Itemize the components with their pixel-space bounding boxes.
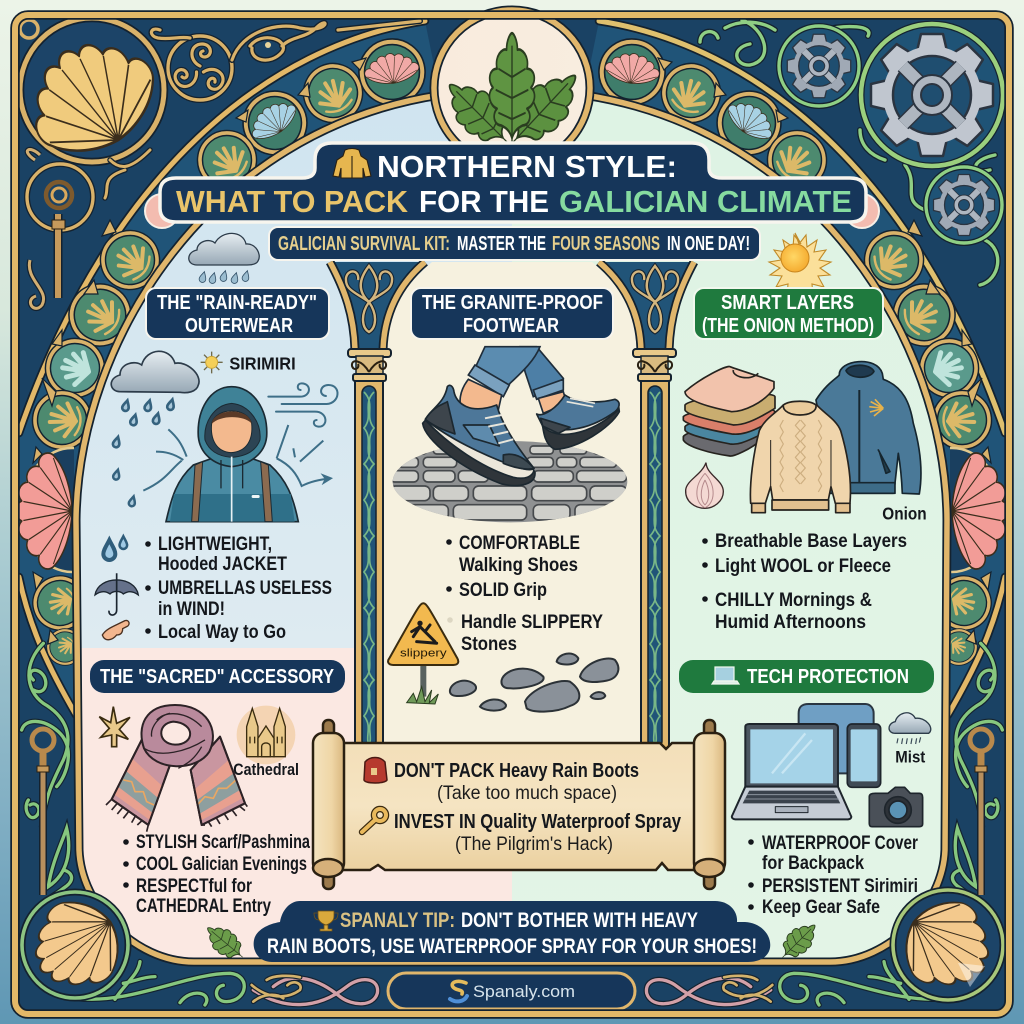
rear walking shoe: [537, 395, 619, 449]
tip banner: [254, 901, 770, 962]
footer pill: Spanaly.com: [473, 982, 575, 1001]
heading: rain-ready outerwear: [146, 288, 329, 339]
cream cable sweater: [750, 401, 850, 513]
left lower vines and staff: [22, 643, 244, 1005]
trouser legs: [460, 347, 567, 413]
icon: laptop: [712, 667, 739, 684]
bottom knotwork right: [646, 976, 772, 1005]
icon: cathedral: [237, 706, 295, 764]
icon: small upper gear: [779, 26, 859, 106]
left scroll roller: [313, 720, 344, 889]
label: cathedral: Cathedral: [233, 760, 299, 779]
icon: smartphone: [847, 724, 881, 787]
text block: outerwear bullets: Hooded JACKET: [158, 554, 287, 575]
arch bands: [19, 21, 1005, 715]
top medallion with oak leaves: [434, 10, 591, 166]
parchment scroll callout: [313, 720, 725, 889]
icon: red bag: [364, 758, 387, 783]
callout line one: DON'T PACK Heavy Rain Boots: [394, 760, 639, 782]
panel: sacred accessory illustration: [99, 705, 299, 832]
text block: tech bullets: for Backpack: [762, 853, 864, 874]
text block: tech bullets: Keep Gear Safe: [762, 897, 880, 918]
icon: bottom right shell medallion: [888, 885, 1008, 1006]
text block: footwear bullets: Handle SLIPPERY: [461, 612, 603, 633]
text block: tech bullets: WATERPROOF Cover: [762, 833, 918, 854]
icon: yellow jacket: [333, 148, 371, 178]
panel: central gothic column: [330, 262, 694, 750]
heading: rain-ready outerwear: THE "RAIN-READY": [157, 292, 317, 314]
tip banner: DON'T BOTHER WITH HEAVY: [461, 909, 698, 932]
tip banner: RAIN BOOTS, USE WATERPROOF SPRAY FOR YOUR SHOES!: [267, 935, 757, 958]
wind arrows: [143, 425, 331, 491]
icon: water drops: [103, 536, 127, 560]
icon: hand: [102, 620, 129, 640]
gold triskelion scrollwork: [105, 21, 420, 198]
title line one: NORTHERN STYLE:: [377, 149, 677, 184]
icon: laptop: [732, 724, 851, 819]
text block: accessory bullets: [123, 832, 310, 917]
text block: smart layers bullets: [702, 531, 907, 633]
text block: smart layers bullets: Humid Afternoons: [715, 612, 866, 633]
label: mist: Mist: [895, 748, 926, 767]
text block: footwear bullets: COMFORTABLE: [459, 533, 580, 554]
pilgrim staff top left: [27, 150, 93, 308]
text block: outerwear bullets: Local Way to Go: [158, 622, 286, 643]
text block: smart layers bullets: Light WOOL or Fleece: [715, 556, 891, 577]
text block: outerwear bullets: in WIND!: [158, 599, 225, 620]
icon: onion: [686, 463, 723, 508]
callout note two: (The Pilgrim's Hack): [455, 834, 613, 855]
icon: bottom left shell medallion: [16, 885, 136, 1006]
heading: granite-proof footwear: [411, 288, 613, 339]
footer pill: [388, 973, 635, 1009]
heading: granite-proof footwear: FOOTWEAR: [463, 315, 559, 337]
icon: storm cloud: [111, 351, 199, 393]
panel: tech protection illustration: [732, 704, 931, 827]
icon: large golden scallop shell in corner medallion: [9, 18, 173, 174]
heading: rain-ready outerwear: OUTERWEAR: [185, 315, 293, 337]
sign label: slippery: [400, 648, 447, 660]
text block: footwear bullets: Stones: [461, 634, 517, 655]
figure in hooded jacket: [166, 387, 298, 522]
left spandrel ornament: [330, 262, 425, 350]
bottom knotwork left: [252, 976, 378, 1005]
icon: waterproof tablet sleeve: [799, 704, 874, 773]
text block: tech bullets: [748, 833, 918, 918]
heading: smart layers: [694, 288, 883, 339]
text block: accessory bullets: STYLISH Scarf/Pashmina: [136, 832, 310, 853]
icon: mist cloud: [889, 713, 931, 744]
callout line two: INVEST IN Quality Waterproof Spray: [394, 811, 682, 833]
icon: camera: [869, 787, 923, 827]
raindrops: [112, 399, 175, 507]
panel: arched background: [60, 80, 962, 970]
text block: outerwear bullets: LIGHTWEIGHT,: [158, 534, 272, 555]
title banner: [160, 143, 866, 222]
icon: umbrella: [95, 573, 138, 615]
right lower vines and staff: [780, 643, 1002, 1005]
wind lines: [268, 383, 338, 427]
heading: smart layers: SMART LAYERS: [721, 292, 854, 314]
icon: trophy: [314, 911, 338, 931]
heading: granite-proof footwear: THE GRANITE-PROOF: [422, 292, 603, 314]
text block: smart layers bullets: Breathable Base Layers: [715, 531, 907, 552]
subtitle banner: [269, 227, 760, 260]
icon: slippery warning sign: [388, 603, 458, 704]
subtitle banner: FOUR SEASONS: [552, 233, 660, 255]
tip banner: SPANALY TIP:: [340, 909, 455, 932]
right scroll roller: [694, 720, 725, 889]
text block: outerwear bullets: [145, 534, 332, 643]
icon: small sun: [201, 352, 223, 373]
panel: rain-ready outerwear illustration: [95, 351, 338, 640]
left medallion chain of shells: [16, 38, 426, 670]
subtitle banner: MASTER THE: [457, 233, 546, 255]
navy jacket: [816, 362, 921, 494]
label: onion: Onion: [882, 503, 927, 523]
panel: smart layers illustration: [683, 362, 927, 523]
subtitle banner: IN ONE DAY!: [667, 233, 750, 255]
front walking shoe: [423, 385, 535, 486]
heading: sacred accessory: THE "SACRED" ACCESSORY: [100, 666, 335, 688]
corner ring: [20, 20, 38, 38]
cobblestone ground: [390, 441, 627, 522]
icon: spanaly logo: [450, 981, 467, 1001]
stack of folded shirts: [683, 367, 775, 456]
text block: footwear bullets: Walking Shoes: [459, 555, 578, 576]
icon: oak leaf left: [200, 919, 250, 966]
right spandrel ornament: [599, 262, 694, 350]
panel: footwear illustration: [388, 347, 627, 712]
heading: smart layers: (THE ONION METHOD): [702, 315, 874, 337]
icon: rain cloud: [189, 233, 259, 284]
scarf: [106, 705, 247, 832]
icon: oak leaf right: [774, 917, 823, 966]
text block: footwear bullets: [446, 533, 603, 655]
icon: key: [362, 809, 386, 832]
callout note one: (Take too much space): [437, 783, 617, 804]
text block: accessory bullets: COOL Galician Evenings: [136, 854, 307, 875]
pink shell accents behind title: [145, 194, 879, 228]
text block: outerwear bullets: UMBRELLAS USELESS: [158, 578, 332, 599]
subtitle banner: GALICIAN SURVIVAL KIT:: [278, 233, 450, 255]
text block: accessory bullets: CATHEDRAL Entry: [136, 896, 271, 917]
stones: [450, 653, 618, 712]
title line two white: FOR THE: [419, 184, 549, 219]
title line two gold: WHAT TO PACK: [176, 184, 409, 219]
heading: tech protection: [679, 660, 934, 693]
icon: small lower gear: [926, 167, 1002, 243]
icon: large gear: [861, 24, 1003, 166]
left pillar: [348, 349, 391, 748]
text block: tech bullets: PERSISTENT Sirimiri: [762, 876, 918, 897]
text block: footwear bullets: SOLID Grip: [459, 580, 547, 601]
title line two green: GALICIAN CLIMATE: [559, 184, 852, 219]
heading: sacred accessory: [90, 660, 345, 693]
label: sirimiri: SIRIMIRI: [229, 353, 296, 373]
text block: accessory bullets: RESPECTful for: [136, 876, 252, 897]
icon: sun: [769, 233, 831, 299]
right medallion chain of shells: [598, 38, 1008, 670]
heading: tech protection: TECH PROTECTION: [747, 666, 909, 688]
icon: pilgrim star: [99, 707, 130, 747]
text block: smart layers bullets: CHILLY Mornings &: [715, 590, 872, 611]
right pillar: [633, 349, 676, 748]
gear medallions top right: [700, 20, 1003, 285]
